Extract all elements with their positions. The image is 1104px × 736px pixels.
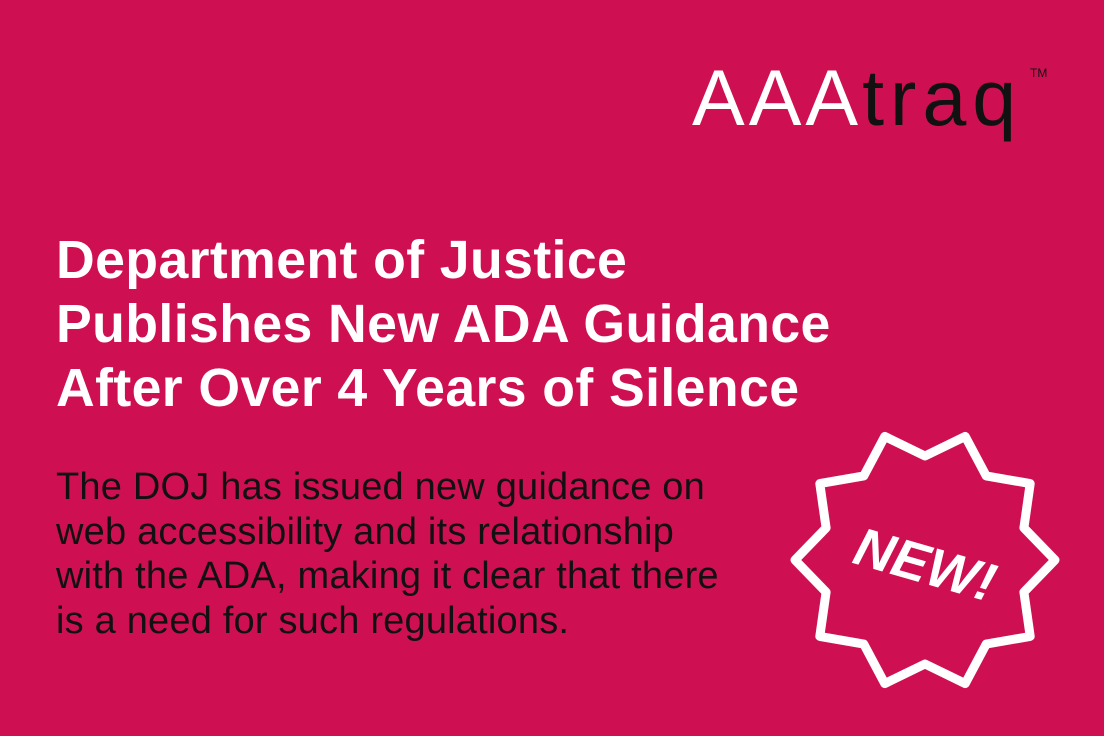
body text	[56, 466, 719, 642]
body text: web accessibility and its relationship	[56, 510, 674, 552]
trademark: TM	[1030, 66, 1047, 80]
body text: is a need for such regulations.	[56, 600, 569, 642]
title	[56, 230, 831, 418]
badge: NEW!: NEW!	[848, 516, 1002, 614]
body text: The DOJ has issued new guidance on	[56, 466, 705, 508]
body text: with the ADA, making it clear that there	[56, 555, 719, 597]
title: Department of Justice	[56, 230, 627, 290]
logo: AAAtraq	[692, 53, 1022, 142]
title: Publishes New ADA Guidance	[56, 294, 831, 354]
title: After Over 4 Years of Silence	[56, 358, 799, 418]
